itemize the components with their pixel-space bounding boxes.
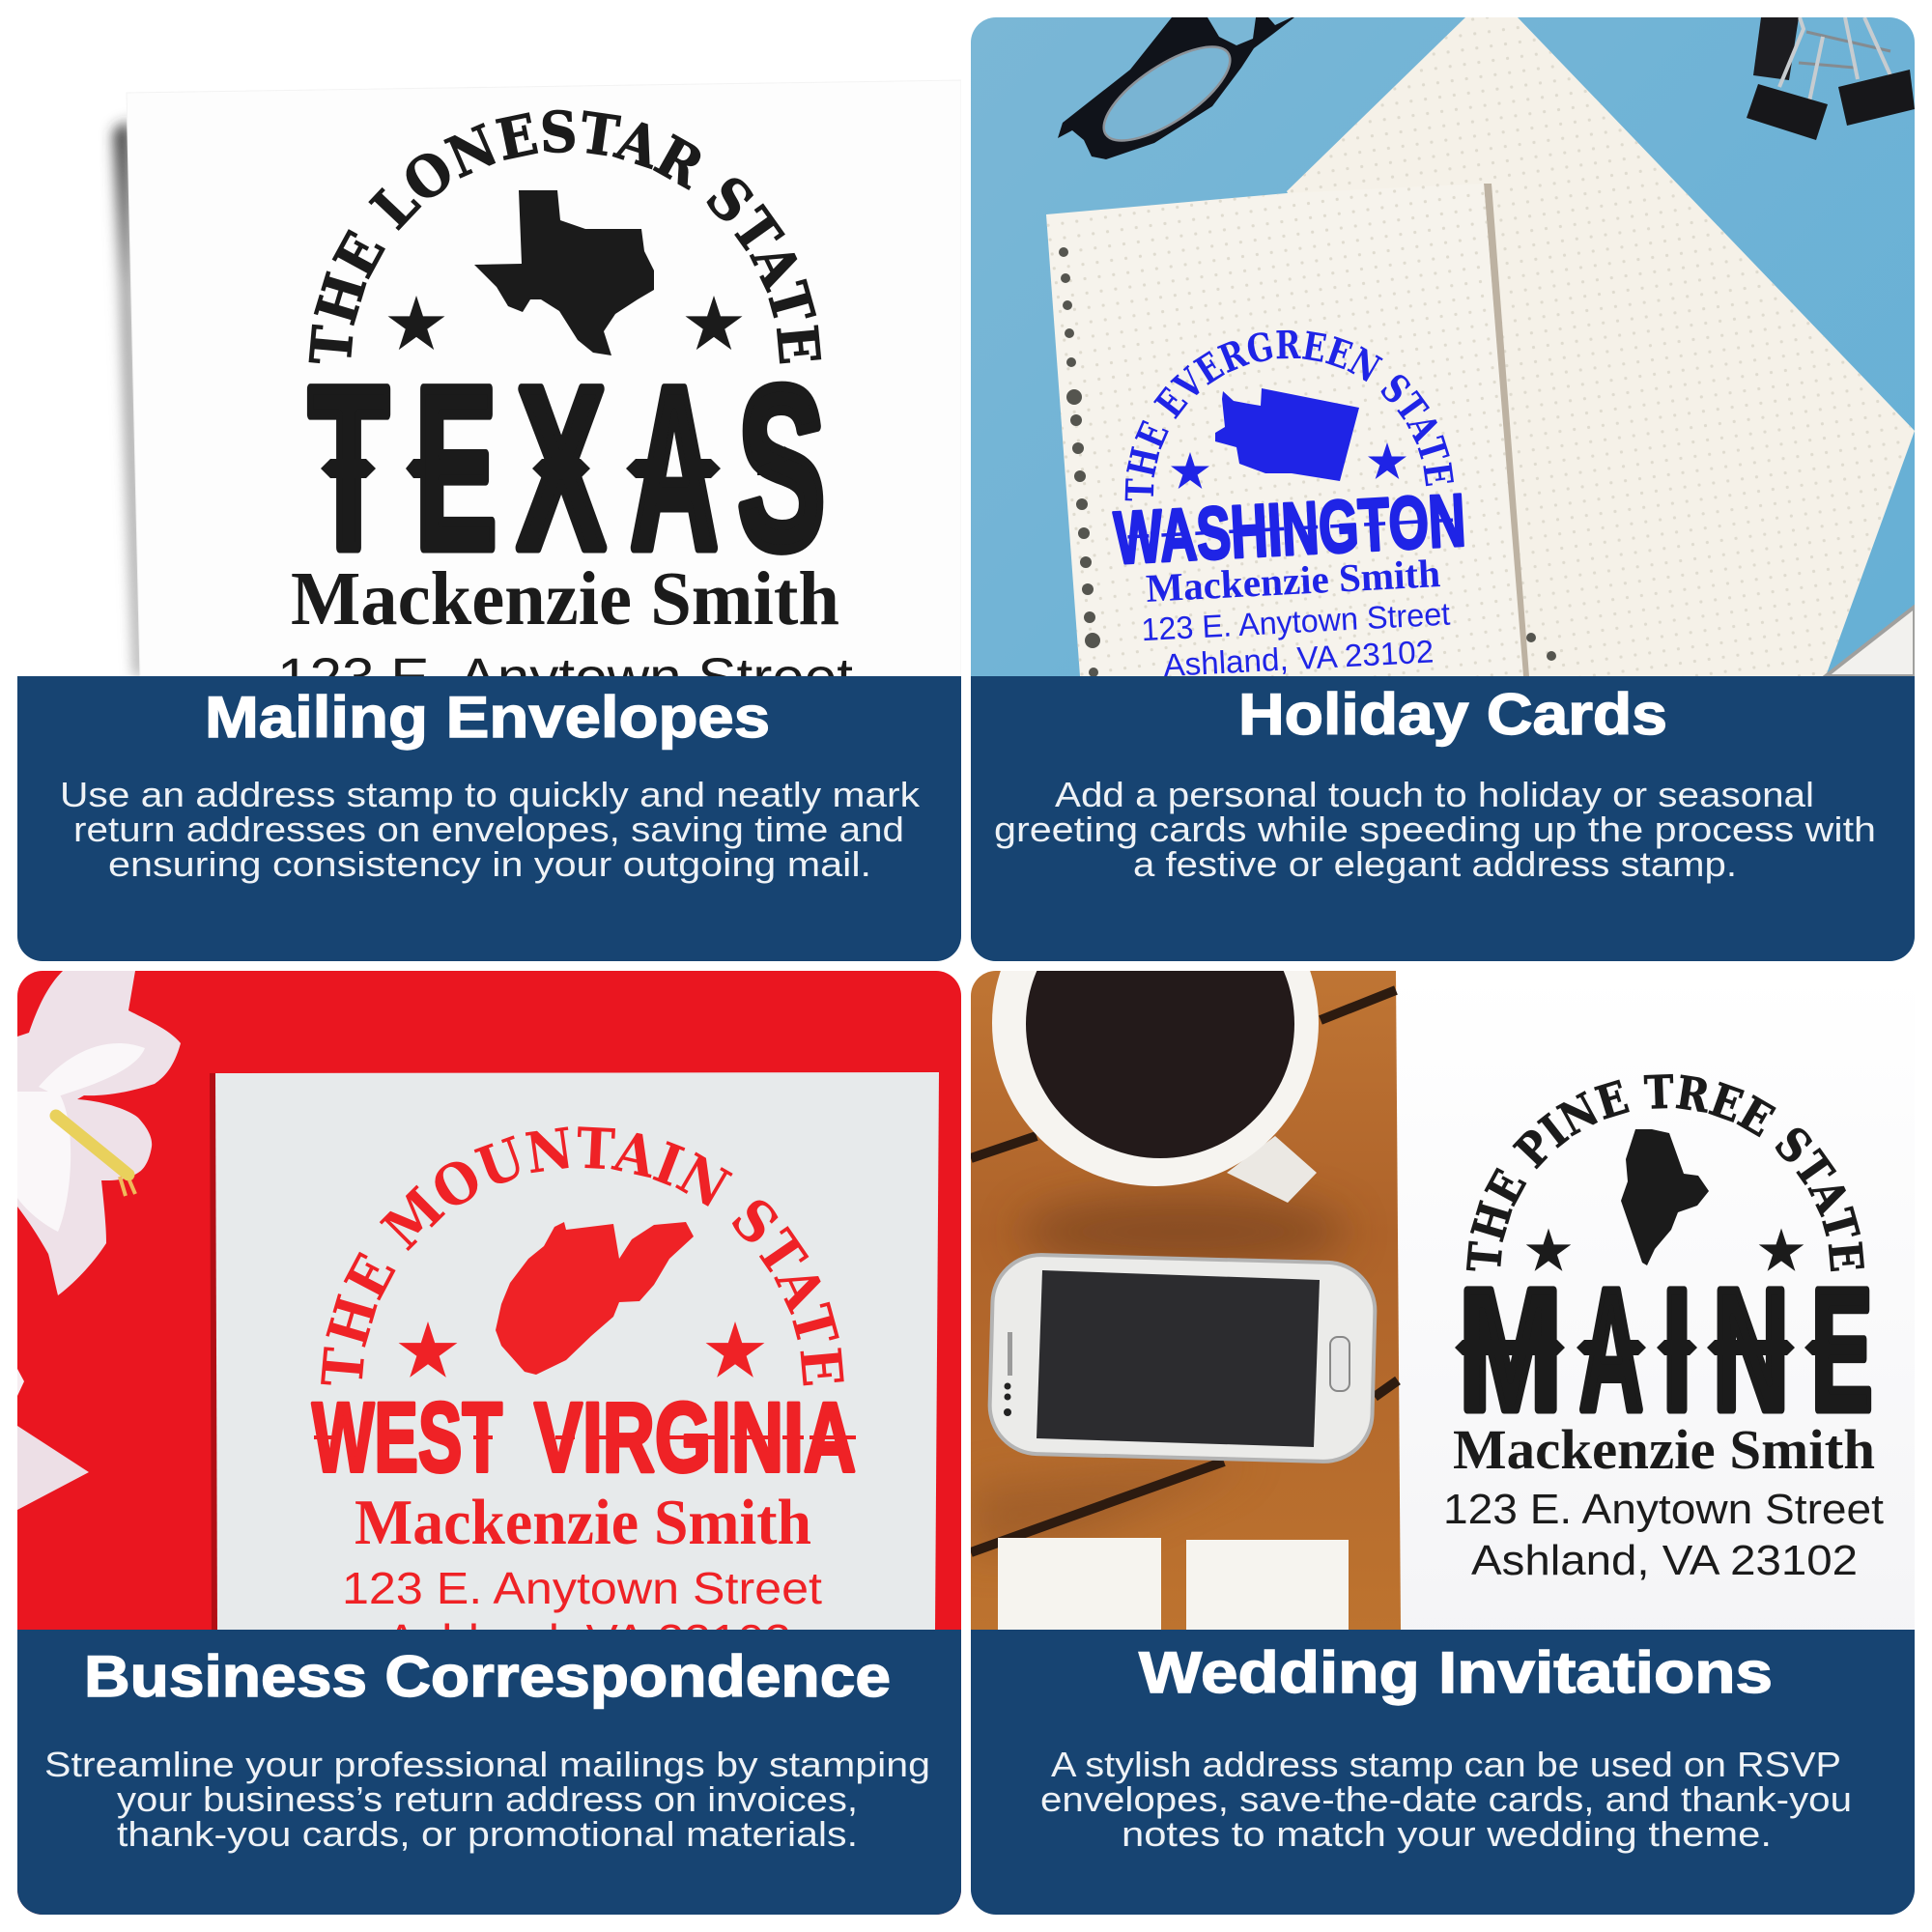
icon: star right [1368,442,1406,479]
icon: smartphone [988,1254,1377,1463]
rotated stamp text [1112,330,1464,676]
stamp name: Mackenzie Smith [291,557,839,641]
icon: coffee cup [992,860,1319,1203]
description [994,775,1876,884]
stamp: West Virginia [311,1126,856,1630]
caption bar [17,1630,961,1915]
heading: Holiday Cards [1238,682,1667,747]
heading: Business Correspondence [84,1644,891,1709]
stamp arc text: THE EVERGREEN STATE [1124,330,1454,500]
stamp city: Ashland, VA 23102 [385,1615,791,1665]
stamp street: 123 E. Anytown Street [277,646,853,707]
stamp state name: E [415,339,497,597]
stamp state name: A [630,339,719,597]
stamp street: 123 E. Anytown Street [1141,596,1451,647]
stamp state name: X [518,339,605,597]
icon: glasses [1058,17,1294,159]
description: thank-you cards, or promotional materials. [117,1814,858,1854]
panel: business correspondence [17,971,961,1915]
icon: white flower [17,971,181,1510]
icon: Maine map [1621,1129,1709,1265]
front dotted paper [1046,184,1523,676]
stamp state name [307,381,823,555]
stamp city: Ashland, VA 23102 [1162,633,1435,683]
description: a festive or elegant address stamp. [1133,844,1737,884]
caption bar [971,1630,1915,1915]
stamp arc text: THE LONESTAR STATE [309,110,821,363]
stamp state name: N [1713,1253,1789,1446]
icon: West Virginia map [496,1222,694,1375]
description [1040,1745,1852,1854]
wood table [971,971,1401,1630]
icon: star right [686,296,742,350]
stamp state name: E [1811,1253,1872,1446]
stamp arc text: THE PINE TREE STATE [1466,1074,1864,1271]
heading: Mailing Envelopes [205,685,770,750]
paper sheet [127,80,961,676]
panel: wedding invitations [971,971,1915,1915]
stamp: Maine [1447,1074,1884,1580]
stamp state name: T [309,339,388,597]
description: Use an address stamp to quickly and neatly mark [60,775,921,814]
stamp name: Mackenzie Smith [1145,551,1441,611]
caption bar [17,676,961,961]
stamp state name: S [738,339,825,597]
stamp state name: I [1662,1253,1691,1446]
front paper edge [1484,184,1529,676]
paper stack corner [1826,607,1915,676]
stamp state name [312,1382,856,1492]
stamp state name [1455,1253,1872,1446]
paper shadow [114,121,143,676]
stamp arc text: THE MOUNTAIN STATE [321,1126,844,1385]
icon: star right [706,1321,764,1378]
stamp state name [1112,493,1464,564]
description: envelopes, save-the-date cards, and thank-you [1040,1779,1852,1819]
description: Streamline your professional mailings by stamping [44,1745,930,1784]
description [44,1745,930,1854]
stamp state name: M [1459,1253,1562,1446]
icon: binder clips [1747,17,1915,140]
icon: star left [1171,452,1209,489]
description: ensuring consistency in your outgoing mail. [108,844,871,884]
description: notes to match your wedding theme. [1122,1814,1772,1854]
stamp name: Mackenzie Smith [355,1487,811,1558]
icon: Washington map [1215,388,1359,481]
spiral holes [1059,247,1556,677]
card shadow [210,1073,217,1630]
description: return addresses on envelopes, saving time and [73,810,904,849]
stamp street: 123 E. Anytown Street [342,1563,822,1613]
heading: Wedding Invitations [1139,1640,1773,1705]
stamp: Washington [1112,330,1464,676]
icon: star left [388,296,444,350]
description [60,775,921,884]
icon: star left [1526,1229,1571,1271]
description: A stylish address stamp can be used on RSVP [1051,1745,1841,1784]
stamp: Texas [282,110,852,676]
icon: star right [1759,1229,1804,1271]
description: Add a personal touch to holiday or seasonal [1055,775,1814,814]
caption bar [971,676,1915,961]
stamp street: 123 E. Anytown Street [1443,1486,1884,1533]
stamp state name: WEST [312,1382,502,1492]
white card [215,1072,939,1630]
icon: star left [399,1321,457,1378]
back dotted paper [1287,17,1915,676]
description: your business’s return address on invoices, [117,1779,858,1819]
stamp state name: VIRGINIA [534,1382,856,1492]
panel: mailing envelopes [17,79,961,961]
panel: holiday cards [971,17,1915,961]
stamp state name: WASHINGTON [1112,479,1467,581]
stamp state name: A [1579,1253,1643,1446]
description: greeting cards while speeding up the process with [994,810,1876,849]
stamp name: Mackenzie Smith [1453,1418,1875,1481]
stamp city: Ashland, VA 23102 [1471,1537,1858,1584]
icon: Texas map [474,190,654,355]
white cards [998,1538,1349,1630]
